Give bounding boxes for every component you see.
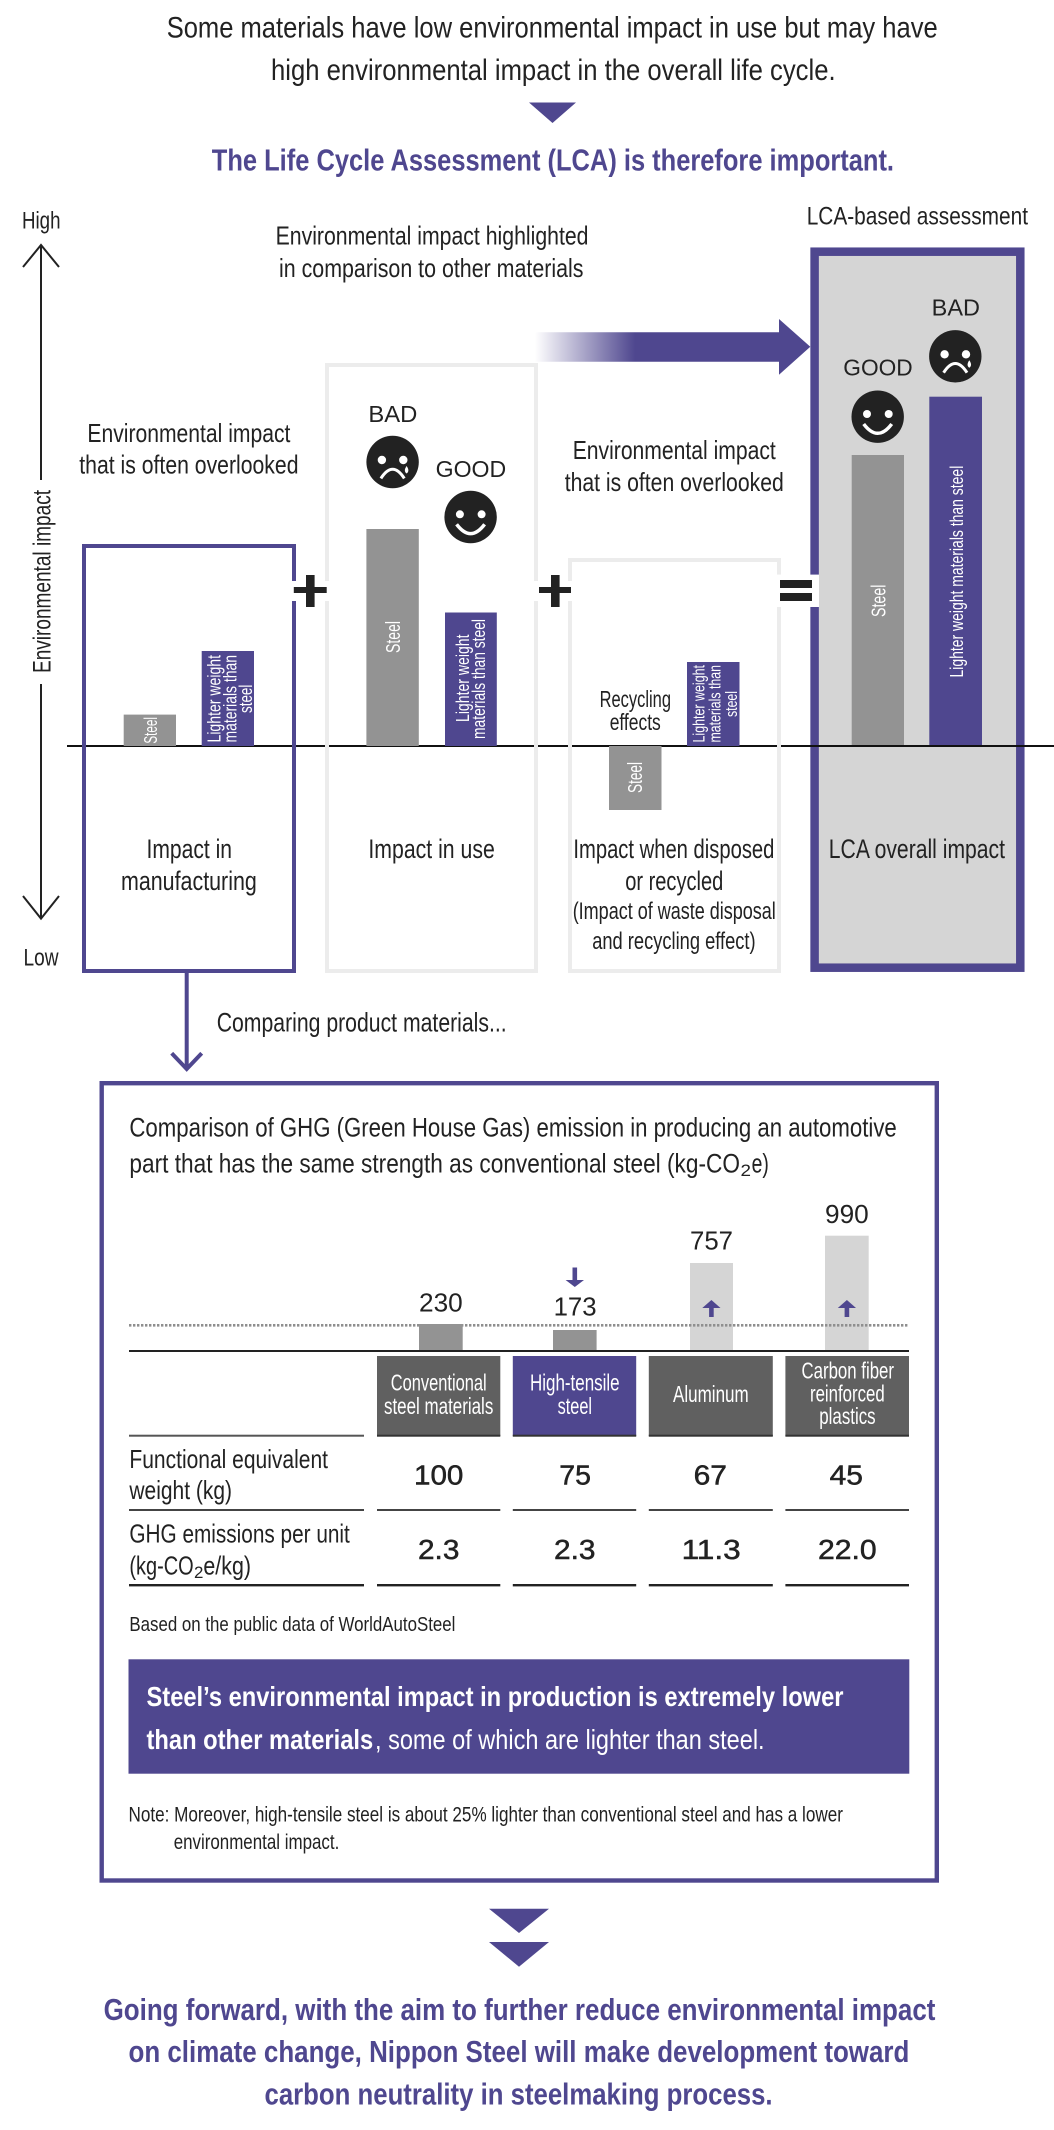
bar: lighter weight materials: steel [236,685,256,713]
title: GHG comparison: e) [752,1149,769,1179]
callout: steel impact: Steel’s environmental impact in production is extremely lower [146,1681,844,1712]
icon: plus sign 1 [290,575,330,607]
row label: functional equivalent weight: weight (kg) [129,1475,232,1505]
source note: Based on the public data of WorldAutoSteel [129,1613,455,1636]
row label: GHG emissions per unit [129,1518,350,1582]
icon: down arrow [566,1268,584,1287]
values: functional weight: 45 [830,1460,863,1491]
title: GHG comparison: part that has the same strength as conventional steel (kg-CO [129,1149,740,1179]
header: carbon fiber: Carbon fiber [802,1358,894,1384]
closing statement [104,1992,935,2111]
label: comparing product materials: Comparing product materials... [217,1008,507,1038]
row label: GHG emissions per unit: (kg-CO [129,1551,194,1581]
vertical axis: environmental impact: High [22,208,60,235]
vertical axis: environmental impact: Low [24,945,59,972]
intro text: Some materials have low environmental impact in use but may have [167,12,938,44]
header: conventional steel [377,1356,500,1436]
icon: triangle pointing down [529,102,576,123]
label: impact in manufacturing: Impact in [146,834,232,864]
bar: lighter weight materials: Lighter weight [204,655,224,742]
note [128,1804,843,1854]
label: GOOD: GOOD [843,355,913,381]
closing statement: carbon neutrality in steelmaking process. [264,2076,773,2111]
label: impact in manufacturing: manufacturing [121,866,257,896]
bar: steel [852,455,904,746]
header: carbon fiber: reinforced [810,1380,885,1406]
panel: impact in manufacturing [84,546,294,971]
label: GOOD: GOOD [436,456,506,482]
panel: LCA overall impact [815,252,1020,968]
annotation: overlooked impact (disposal) [565,435,784,497]
bar: lighter weight materials: Lighter weight materials than steel [947,466,967,678]
label: impact when disposed: Impact when disposed [573,834,774,864]
icon: sad face [929,330,982,382]
row label: GHG emissions per unit: e/kg) [203,1551,251,1581]
header: carbon fiber [785,1356,909,1436]
note: Note: Moreover, high-tensile steel is about 25% lighter than conventional steel and has a lower [128,1804,843,1827]
values: emissions per unit: 2.3 [418,1534,459,1565]
header: aluminum [649,1356,773,1436]
bar: lighter weight materials [687,662,741,746]
header: high-tensile steel: High-tensile [530,1370,620,1396]
intro text: high environmental impact in the overall life cycle. [271,54,836,87]
closing statement: on climate change, Nippon Steel will make development toward [128,2034,909,2069]
annotation: overlooked impact (disposal): Environmental impact [573,435,776,465]
bar: steel: Steel [868,585,890,617]
bar: steel [366,529,419,746]
annotation: overlooked impact (manufacturing): that is often overlooked [79,450,298,480]
row label: functional equivalent weight [129,1444,329,1505]
values: emissions per unit: 2.3 [554,1534,596,1565]
label: impact when disposed: or recycled [625,866,723,896]
bar chart: GHG emissions [129,1201,909,1352]
bar: steel: Steel [383,621,405,653]
arrow: highlighted to LCA [535,319,810,375]
value: 173: 173 [554,1294,597,1322]
icon: up arrow carbon fiber [838,1300,856,1317]
title: GHG comparison [129,1112,897,1180]
value: 990: 990 [825,1201,869,1229]
values: functional weight [414,1460,863,1491]
title: GHG comparison: 2 [740,1161,751,1180]
baseline axis [67,745,1054,747]
label: recycling effects [600,686,671,735]
icon: happy face [852,390,904,443]
table: material comparison [129,1356,909,1586]
label: BAD: BAD [932,295,980,321]
values: functional weight: 75 [559,1460,591,1491]
values: emissions per unit: 11.3 [682,1534,741,1565]
bar: steel [124,715,176,746]
bar: lighter weight materials [929,397,982,746]
icon: plus sign 2 [534,575,574,607]
bar: steel: Steel [141,717,161,744]
values: emissions per unit: 22.0 [818,1534,877,1565]
icon: equals sign [776,575,819,607]
bar: lighter weight materials [445,612,497,746]
header: high-tensile steel [513,1356,636,1436]
row label: GHG emissions per unit: GHG emissions per unit [129,1518,350,1548]
header: conventional steel: steel materials [384,1393,493,1419]
label: impact when disposed: and recycling effect) [592,928,756,955]
note: environmental impact. [174,1831,339,1854]
header: conventional steel: Conventional [391,1370,487,1396]
heading: LCA importance: The Life Cycle Assessment (LCA) is therefore important. [212,143,894,178]
values: functional weight: 67 [694,1460,727,1491]
panel: GHG comparison [102,1083,937,1880]
label: impact when disposed [573,834,776,955]
label: impact when disposed: (Impact of waste disposal [573,898,776,925]
callout: steel impact: , some of which are lighter than steel. [375,1724,765,1755]
annotation: overlooked impact (disposal): that is often overlooked [565,467,784,497]
bar: steel negative [609,746,662,810]
vertical axis: environmental impact: Environmental impact [28,490,56,673]
bar: lighter weight materials: Lighter weight [453,634,473,722]
callout: steel impact: than other materials [146,1724,373,1755]
bar: lighter weight materials: materials than steel [469,619,489,739]
vertical axis: environmental impact [22,208,60,972]
label: impact in manufacturing [121,834,257,896]
header: high-tensile steel: steel [558,1393,592,1419]
arrow: manufacturing to comparison [172,972,202,1069]
icon: happy face [444,491,497,543]
header: aluminum: Aluminum [673,1381,749,1407]
bar: lighter weight materials: steel [722,691,741,717]
annotation: highlighted impact [276,221,588,283]
row label: functional equivalent weight: Functional equivalent [129,1444,329,1474]
callout: steel impact [128,1659,909,1774]
title: GHG comparison: Comparison of GHG (Green House Gas) emission in producing an automotive [129,1112,897,1142]
bar: lighter weight materials: Lighter weight [690,665,708,742]
annotation: highlighted impact: in comparison to other materials [279,253,584,283]
row label: GHG emissions per unit: 2 [194,1563,203,1582]
icon: double triangle pointing down [489,1909,549,1967]
annotation: overlooked impact (manufacturing): Environmental impact [87,418,291,448]
icon: up arrow aluminum [702,1300,720,1317]
bar: lighter weight materials: materials than [706,665,725,742]
label: recycling effects: Recycling [600,686,671,712]
values: functional weight: 100 [414,1460,463,1491]
icon: sad face [366,436,419,488]
label: impact in use: Impact in use [368,834,495,864]
label: recycling effects: effects [610,709,661,735]
value: 757: 757 [690,1228,733,1256]
values: emissions per unit [418,1534,877,1565]
bar: lighter weight materials [202,651,256,746]
panel: impact in use [327,365,536,971]
intro text [167,12,938,87]
bar: steel negative: Steel [625,762,647,793]
annotation: overlooked impact (manufacturing) [79,418,298,480]
label: LCA overall impact: LCA overall impact [829,834,1006,864]
value: 230: 230 [419,1290,463,1318]
panel: impact when disposed or recycled [570,560,779,971]
bar: lighter weight materials: materials than [221,655,241,742]
header: carbon fiber: plastics [819,1403,876,1429]
annotation: highlighted impact: Environmental impact highlighted [276,221,588,251]
label: BAD: BAD [368,401,417,427]
